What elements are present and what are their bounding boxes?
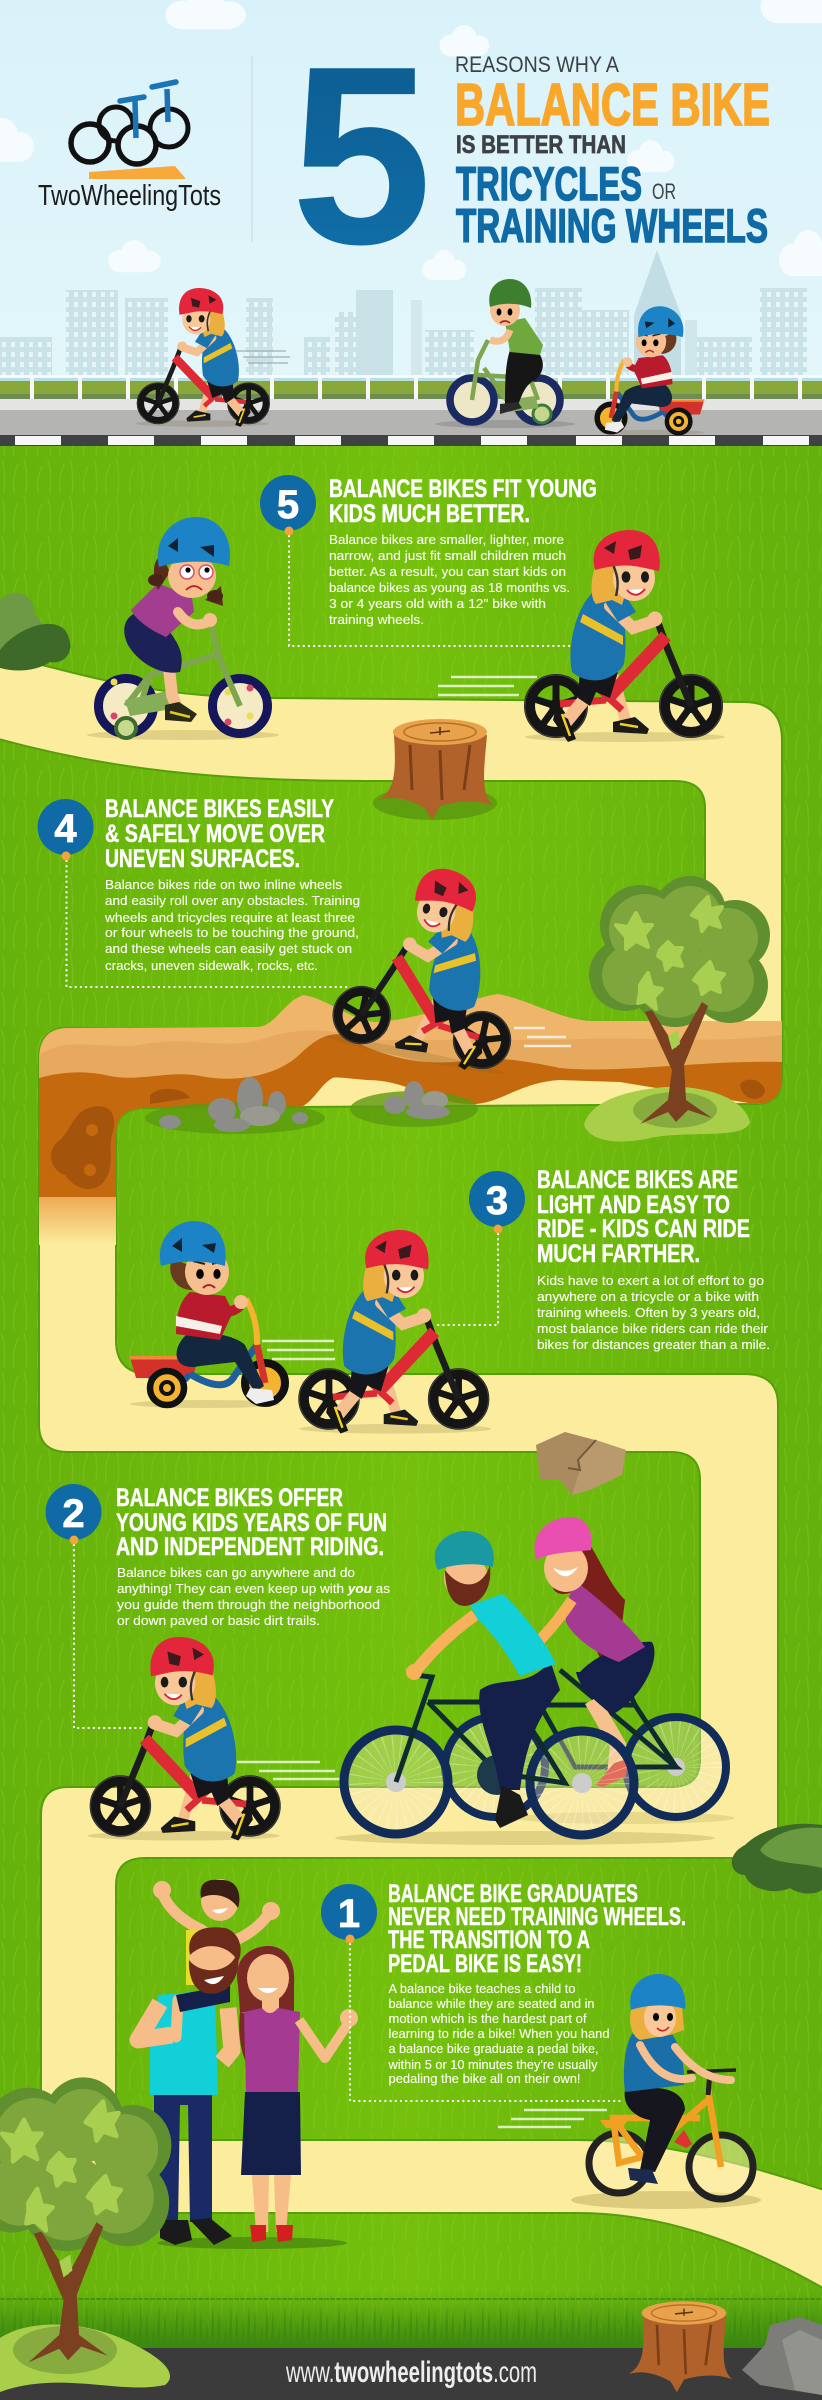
- speed lines: [498, 2110, 607, 2127]
- rocks: reason 4: [145, 1077, 478, 1134]
- heading: [388, 1880, 686, 1978]
- speed lines: [237, 1762, 340, 1779]
- kid: balance bike over bumps: [325, 852, 542, 1078]
- body text: training wheels. Often by 3 years old,: [537, 1305, 760, 1320]
- dad: [138, 1927, 241, 2245]
- heading: & SAFELY MOVE OVER: [105, 820, 325, 848]
- badge 2: 2: [62, 1492, 85, 1536]
- couple on bicycles: [335, 1517, 735, 1845]
- logo: TwoWheelingTots: [38, 82, 221, 212]
- grass blades: [0, 2290, 822, 2350]
- speed lines: [438, 677, 537, 695]
- body text: motion which is the hardest part of: [388, 2011, 587, 2026]
- heading: THE TRANSITION TO A: [388, 1926, 590, 1954]
- heading: YOUNG KIDS YEARS OF FUN: [116, 1509, 387, 1537]
- speed lines: [262, 1341, 335, 1359]
- dirt section: [39, 994, 782, 1245]
- heading: [116, 1484, 387, 1561]
- bush: upper left: [0, 593, 70, 670]
- body text: narrow, and just fit small children much: [329, 548, 566, 563]
- header: sky: [0, 0, 822, 446]
- heading: BALANCE BIKES FIT YOUNG: [329, 475, 597, 503]
- body text: bikes for distances greater than a mile.: [537, 1337, 770, 1352]
- heading: MUCH FARTHER.: [537, 1240, 700, 1268]
- tree: bottom left: [0, 2077, 171, 2392]
- body text: wheels and tricycles require at least three: [104, 910, 355, 925]
- badge 3: [469, 1171, 525, 1234]
- body text: Balance bikes ride on two inline wheels: [105, 877, 343, 892]
- heading: UNEVEN SURFACES.: [105, 845, 300, 873]
- panel: reason 5: [260, 475, 597, 646]
- badge 1: 1: [338, 1892, 360, 1936]
- skyline: [0, 250, 807, 380]
- panel: reason 3: [435, 1166, 770, 1352]
- body text: cracks, uneven sidewalk, rocks, etc.: [105, 958, 318, 973]
- callout connector: [350, 1943, 621, 2101]
- kid: red helmet balance bike: [88, 1637, 280, 1841]
- callout connector: [74, 1544, 143, 1728]
- title: REASONS WHY A: [455, 52, 619, 77]
- body text: A balance bike teaches a child to: [388, 1981, 576, 1996]
- bush: right: [732, 1824, 822, 1894]
- body text: [104, 877, 360, 973]
- divider: [252, 56, 253, 242]
- heading: PEDAL BIKE IS EASY!: [388, 1950, 582, 1978]
- woman: [534, 1517, 654, 1787]
- fence and hedge: [0, 375, 822, 399]
- kid: pedal bike: [571, 1974, 761, 2209]
- body text: a balance bike graduate a pedal bike,: [388, 2041, 598, 2056]
- road: [0, 399, 822, 446]
- heading: NEVER NEED TRAINING WHEELS.: [388, 1903, 686, 1931]
- man: [406, 1531, 560, 1828]
- badge 5: [260, 475, 316, 536]
- body text: or down paved or basic dirt trails.: [117, 1613, 320, 1628]
- body text: within 5 or 10 minutes they're usually: [388, 2057, 598, 2072]
- badge 4: 4: [54, 807, 77, 851]
- badge 4: [38, 799, 94, 860]
- badge 1: [321, 1884, 377, 1944]
- child on shoulders: [153, 1879, 280, 1985]
- heading: LIGHT AND EASY TO: [537, 1191, 730, 1219]
- body text: [537, 1273, 770, 1352]
- body text: anything! They can even keep up with you as: [117, 1581, 391, 1596]
- logo text: TwoWheelingTots: [38, 180, 221, 212]
- heading: KIDS MUCH BETTER.: [329, 500, 530, 528]
- woman's bike: [445, 1670, 726, 1817]
- body text: pedaling the bike all on their own!: [388, 2071, 580, 2086]
- callout connector: [66, 860, 349, 987]
- man's bike: [344, 1675, 634, 1835]
- body text: and easily roll over any obstacles. Training: [105, 893, 360, 908]
- footer band: [0, 2348, 822, 2400]
- heading: BALANCE BIKES EASILY: [105, 795, 334, 823]
- heading: [329, 475, 597, 528]
- rock: bottom gray: [742, 2317, 822, 2395]
- title: [291, 13, 770, 297]
- kid: purple shirt training wheels: [87, 517, 279, 740]
- website: www.twowheelingtots.com: [285, 2356, 537, 2389]
- heading: RIDE - KIDS CAN RIDE: [537, 1215, 750, 1243]
- title: 5: [291, 13, 432, 297]
- body text: better. As a result, you can start kids on: [329, 564, 566, 579]
- body text: most balance bike riders can ride their: [537, 1321, 769, 1336]
- body text: and these wheels can easily get stuck on: [105, 941, 352, 956]
- heading: BALANCE BIKE GRADUATES: [388, 1880, 638, 1908]
- tree: reason 4: [584, 876, 770, 1142]
- panel: reason 2: [46, 1484, 391, 1728]
- heading: AND INDEPENDENT RIDING.: [116, 1533, 384, 1561]
- speed lines: [236, 351, 290, 363]
- body text: you guide them through the neighborhood: [117, 1597, 380, 1612]
- title: IS BETTER THAN: [456, 131, 626, 159]
- body text: [117, 1565, 391, 1628]
- icon: bikes logo: [71, 82, 188, 179]
- header kid: green helmet training wheels: [435, 279, 575, 428]
- body text: learning to ride a bike! When you hand: [388, 2026, 610, 2041]
- kid: red helmet balance bike: [525, 530, 725, 742]
- body text: Balance bikes are smaller, lighter, more: [329, 532, 564, 547]
- title: TRICYCLES: [456, 157, 642, 210]
- title: OR: [652, 179, 676, 204]
- body text: or four wheels to be touching the ground,: [105, 925, 359, 940]
- header kid: red helmet balance bike: [135, 288, 269, 427]
- kid: red helmet balance bike: [299, 1230, 491, 1434]
- badge 3: 3: [486, 1179, 508, 1223]
- stump: bottom: [628, 2301, 733, 2392]
- badge 2: [46, 1484, 102, 1544]
- panel: reason 4: [38, 795, 360, 987]
- body text: 3 or 4 years old with a 12" bike with: [329, 596, 546, 611]
- body text: [388, 1981, 610, 2086]
- panel: reason 1: [321, 1880, 686, 2101]
- heading: [105, 795, 334, 873]
- badge 5: 5: [277, 483, 299, 527]
- header kid: blue helmet tricycle: [597, 306, 704, 435]
- heading: BALANCE BIKES ARE: [537, 1166, 738, 1194]
- family: [138, 1879, 358, 2249]
- body text: Balance bikes can go anywhere and do: [117, 1565, 355, 1580]
- body text: [329, 532, 570, 627]
- tree stump: path: [373, 719, 497, 820]
- mom: [237, 1946, 358, 2242]
- body text: balance bikes as young as 18 months vs.: [329, 580, 570, 595]
- callout connector: [435, 1233, 498, 1325]
- winding path: [0, 655, 822, 2292]
- kid: blue helmet tricycle: [130, 1221, 285, 1408]
- callout connector: [289, 535, 572, 646]
- body text: Kids have to exert a lot of effort to go: [537, 1273, 764, 1288]
- heading: BALANCE BIKES OFFER: [116, 1484, 343, 1512]
- body text: anywhere on a tricycle or a bike with: [537, 1289, 759, 1304]
- speed lines: [514, 1028, 571, 1046]
- body text: balance while they are seated and in: [388, 1996, 594, 2011]
- clouds: [0, 0, 822, 280]
- heading: [537, 1166, 750, 1268]
- body text: training wheels.: [329, 612, 424, 627]
- rock: brown: [536, 1432, 626, 1495]
